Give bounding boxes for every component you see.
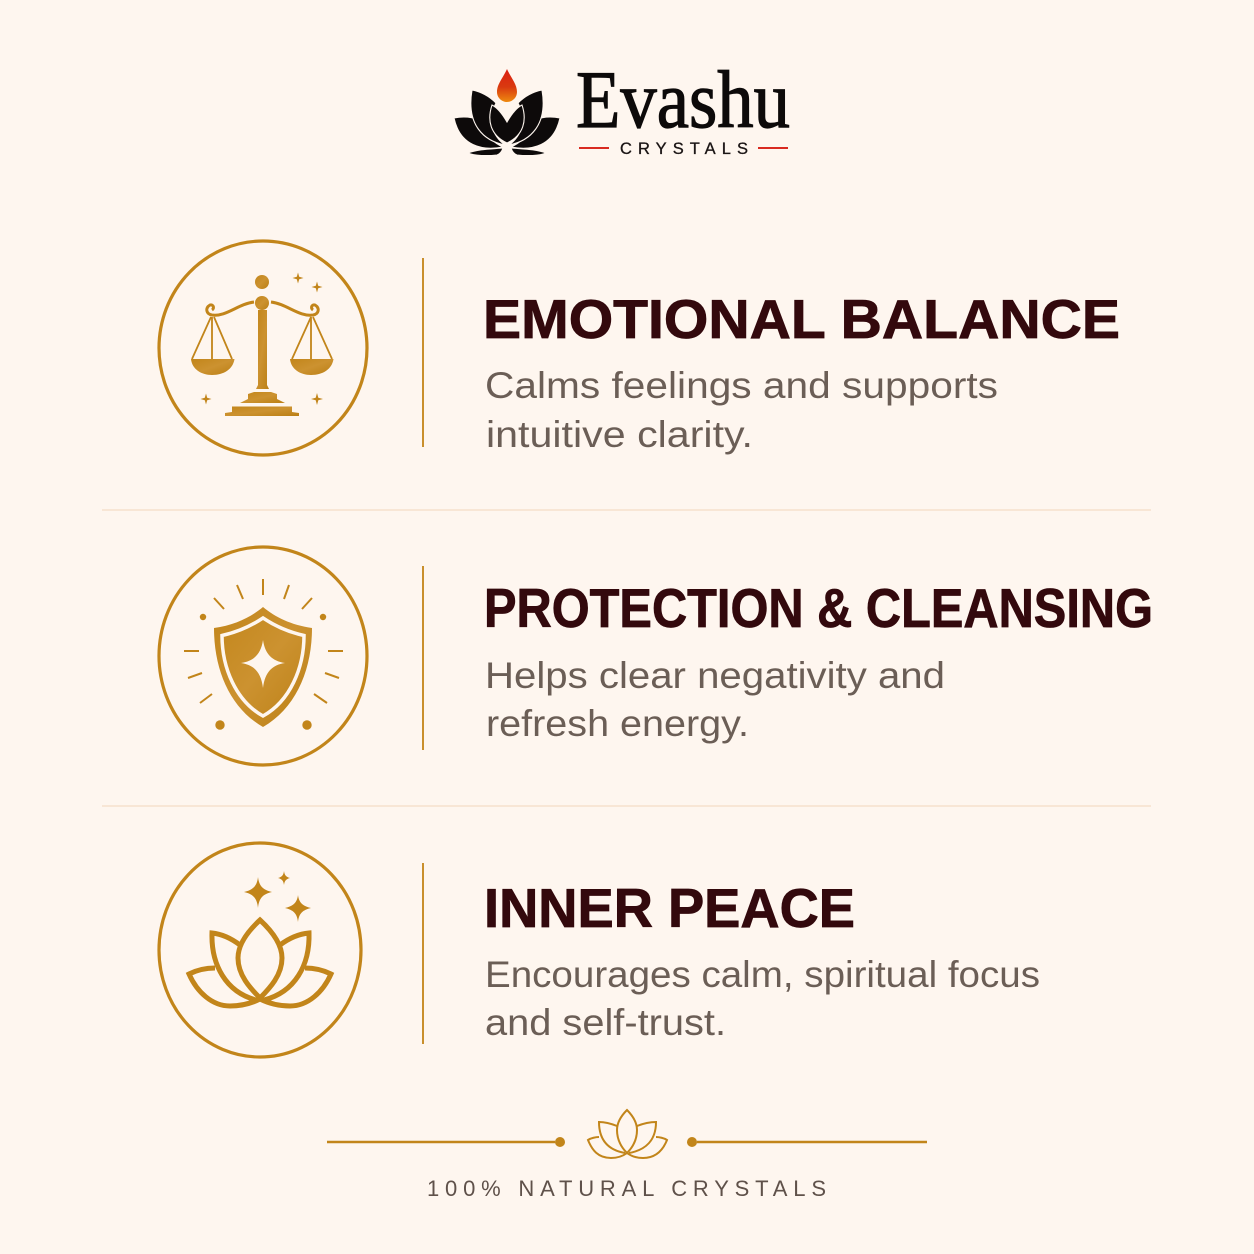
divider line — [422, 863, 424, 1044]
heading: INNER PEACE — [484, 877, 855, 939]
heading: EMOTIONAL BALANCE — [483, 288, 1120, 350]
tagline: 100% NATURAL CRYSTALS — [427, 1176, 826, 1201]
body text: and self-trust. — [485, 1002, 726, 1043]
wordmark: Evashu — [576, 54, 790, 145]
body text — [485, 954, 1040, 1043]
icon: lotus with stars in circle — [159, 843, 361, 1057]
body text: Calms feelings and supports — [485, 365, 998, 406]
logo: Evashu Crystals — [454, 54, 790, 158]
divider line — [422, 566, 424, 750]
footer — [327, 1110, 927, 1201]
sub wordmark with red rules: CRYSTALS — [620, 140, 748, 158]
ornament: lines with dots and small lotus — [327, 1110, 927, 1158]
icon: black lotus with flame drop — [454, 69, 560, 156]
panel: emotional balance — [159, 241, 1120, 455]
body text — [485, 655, 945, 744]
body text: refresh energy. — [486, 703, 749, 744]
icon: balance scales in circle — [159, 241, 367, 455]
body text: Encourages calm, spiritual focus — [485, 954, 1040, 995]
divider line — [422, 258, 424, 447]
heading: PROTECTION & CLEANSING — [484, 577, 1153, 639]
icon: shield with rays in circle — [159, 547, 367, 765]
panel: inner peace — [159, 843, 1040, 1057]
body text — [485, 365, 998, 455]
body text: Helps clear negativity and — [485, 655, 945, 696]
panel: protection and cleansing — [159, 547, 1153, 765]
body text: intuitive clarity. — [486, 414, 753, 455]
